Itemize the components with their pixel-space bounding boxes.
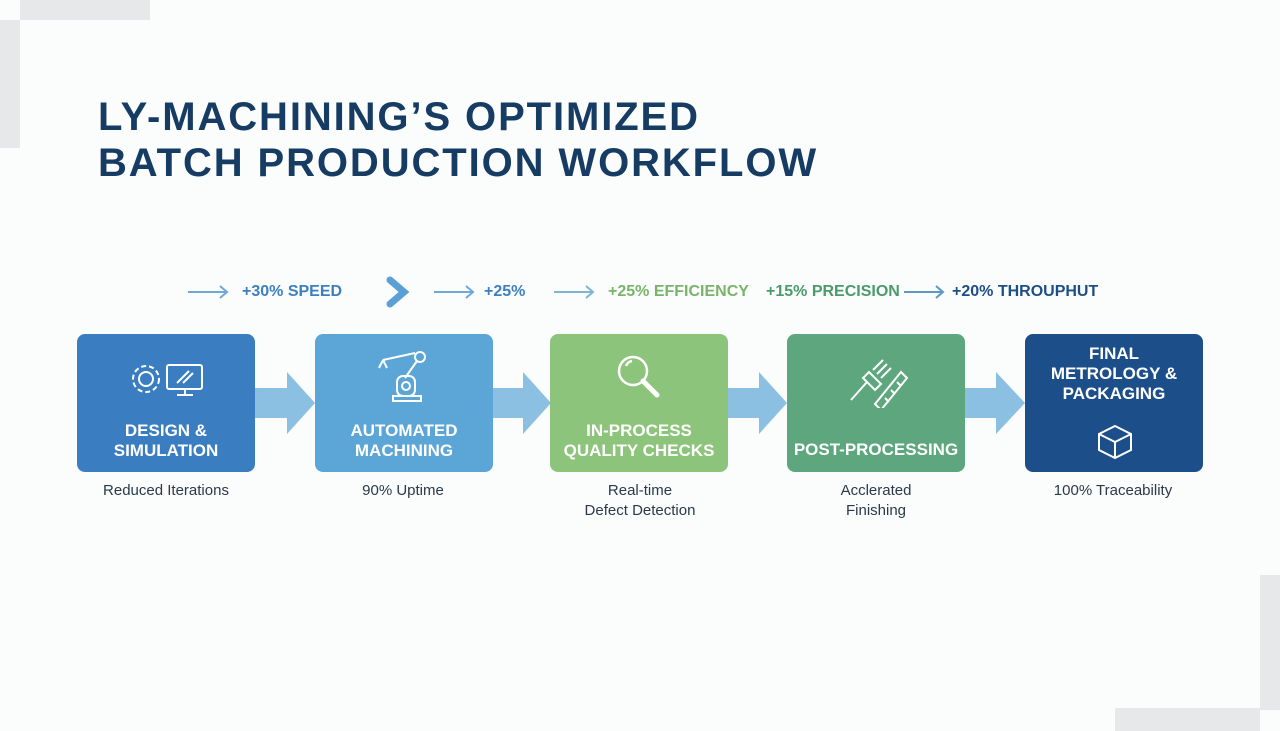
metrics row: +25% [484,283,525,300]
text: Acclerated [841,482,911,499]
metrics row: +15% PRECISION [766,283,900,300]
box: design & simulation [77,334,255,472]
box: design & simulation: SIMULATION [114,441,218,460]
box: final metrology & packaging [1025,334,1203,472]
title: BATCH PRODUCTION WORKFLOW [98,141,818,185]
box: in-process quality checks: IN-PROCESS [586,421,692,440]
metrics row: +25% EFFICIENCY [608,283,749,300]
text: Defect Detection [585,502,695,519]
box: design & simulation: DESIGN & [125,421,207,440]
box: post-processing: POST-PROCESSING [794,440,958,459]
box: final metrology & packaging: FINAL [1089,344,1139,363]
box: final metrology & packaging: PACKAGING [1063,384,1165,403]
metrics row: +20% THROUPHUT [952,283,1098,300]
box: automated machining [315,334,493,472]
box: in-process quality checks: QUALITY CHECKS [564,441,714,460]
text: 90% Uptime [362,482,444,499]
metrics row: +30% SPEED [242,283,342,300]
box: final metrology & packaging: METROLOGY & [1051,364,1177,383]
box: in-process quality checks [550,334,728,472]
metrics row [188,276,1098,308]
text: Real-time [608,482,672,499]
box: automated machining: MACHINING [355,441,453,460]
text: Finishing [846,502,906,519]
decorative corner blocks [20,0,150,20]
title: LY-MACHINING’S OPTIMIZED [98,95,700,139]
title [98,95,818,185]
box: post-processing [787,334,965,472]
captions: Reduced Iterations [103,482,229,499]
text: 100% Traceability [1054,482,1172,499]
box: automated machining: AUTOMATED [350,421,458,440]
